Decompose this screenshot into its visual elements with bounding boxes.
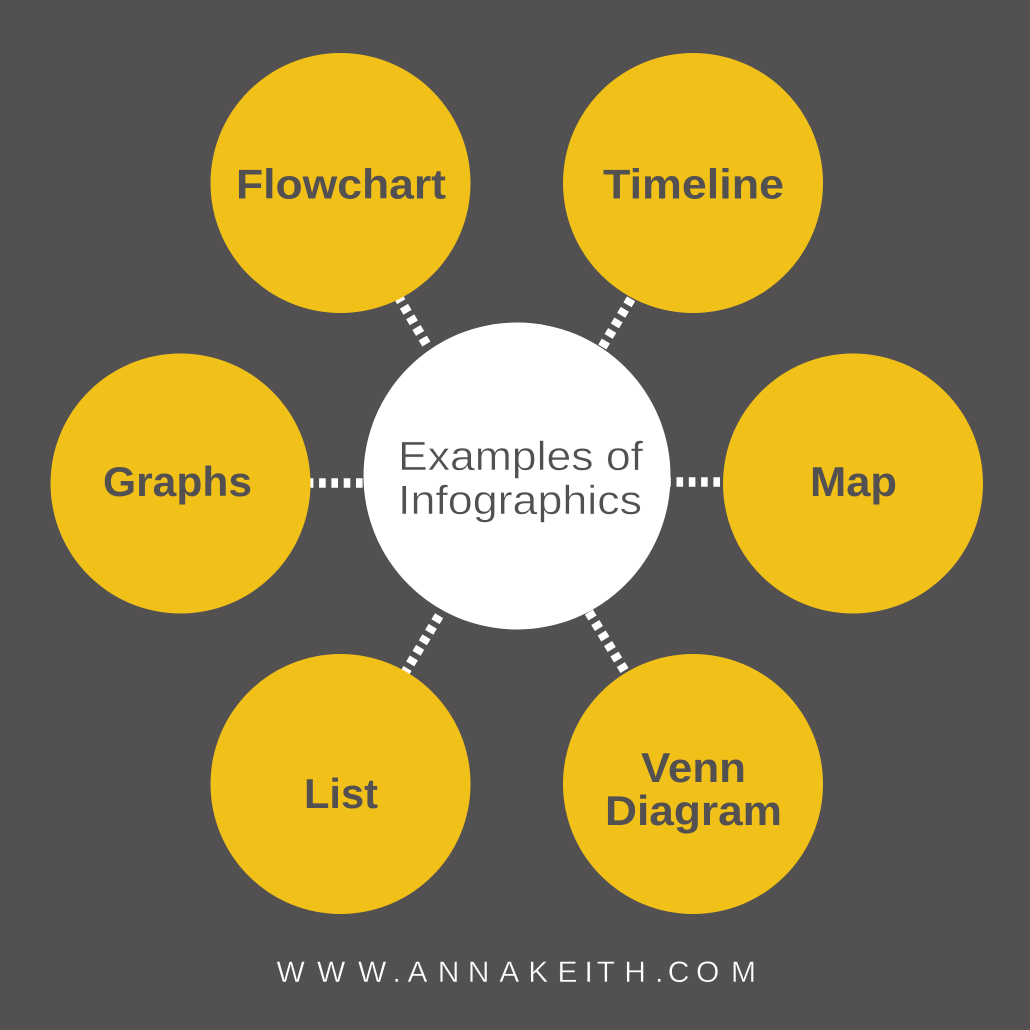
connector: center to Map xyxy=(665,477,720,487)
center title: Infographics xyxy=(398,477,642,523)
label: Timeline: Timeline xyxy=(603,160,784,208)
node: List xyxy=(210,654,470,914)
footer URL: WWW.ANNAKEITH.COM xyxy=(276,956,756,989)
label: Venn Diagram: Diagram xyxy=(605,787,782,834)
center title xyxy=(398,433,644,523)
label: Venn Diagram xyxy=(605,744,782,834)
node: Graphs xyxy=(50,354,310,614)
connector: center to Venn Diagram xyxy=(589,612,626,673)
node: Flowchart xyxy=(210,53,470,313)
node: Venn Diagram xyxy=(563,654,823,914)
node: Map xyxy=(723,354,983,614)
connector: center to Timeline xyxy=(602,288,637,348)
connector: center to Graphs xyxy=(308,478,363,488)
connector: center to Flowchart xyxy=(391,285,426,344)
label: Venn Diagram: Venn xyxy=(641,744,746,791)
label: List: List xyxy=(304,770,378,817)
label: Map: Map xyxy=(810,458,897,505)
node: Timeline xyxy=(563,53,823,313)
label: Flowchart: Flowchart xyxy=(236,160,446,208)
label: Graphs: Graphs xyxy=(103,458,252,505)
connector: center to List xyxy=(403,616,439,676)
center title: Examples of xyxy=(398,433,644,479)
center circle: Examples of Infographics xyxy=(364,322,670,630)
